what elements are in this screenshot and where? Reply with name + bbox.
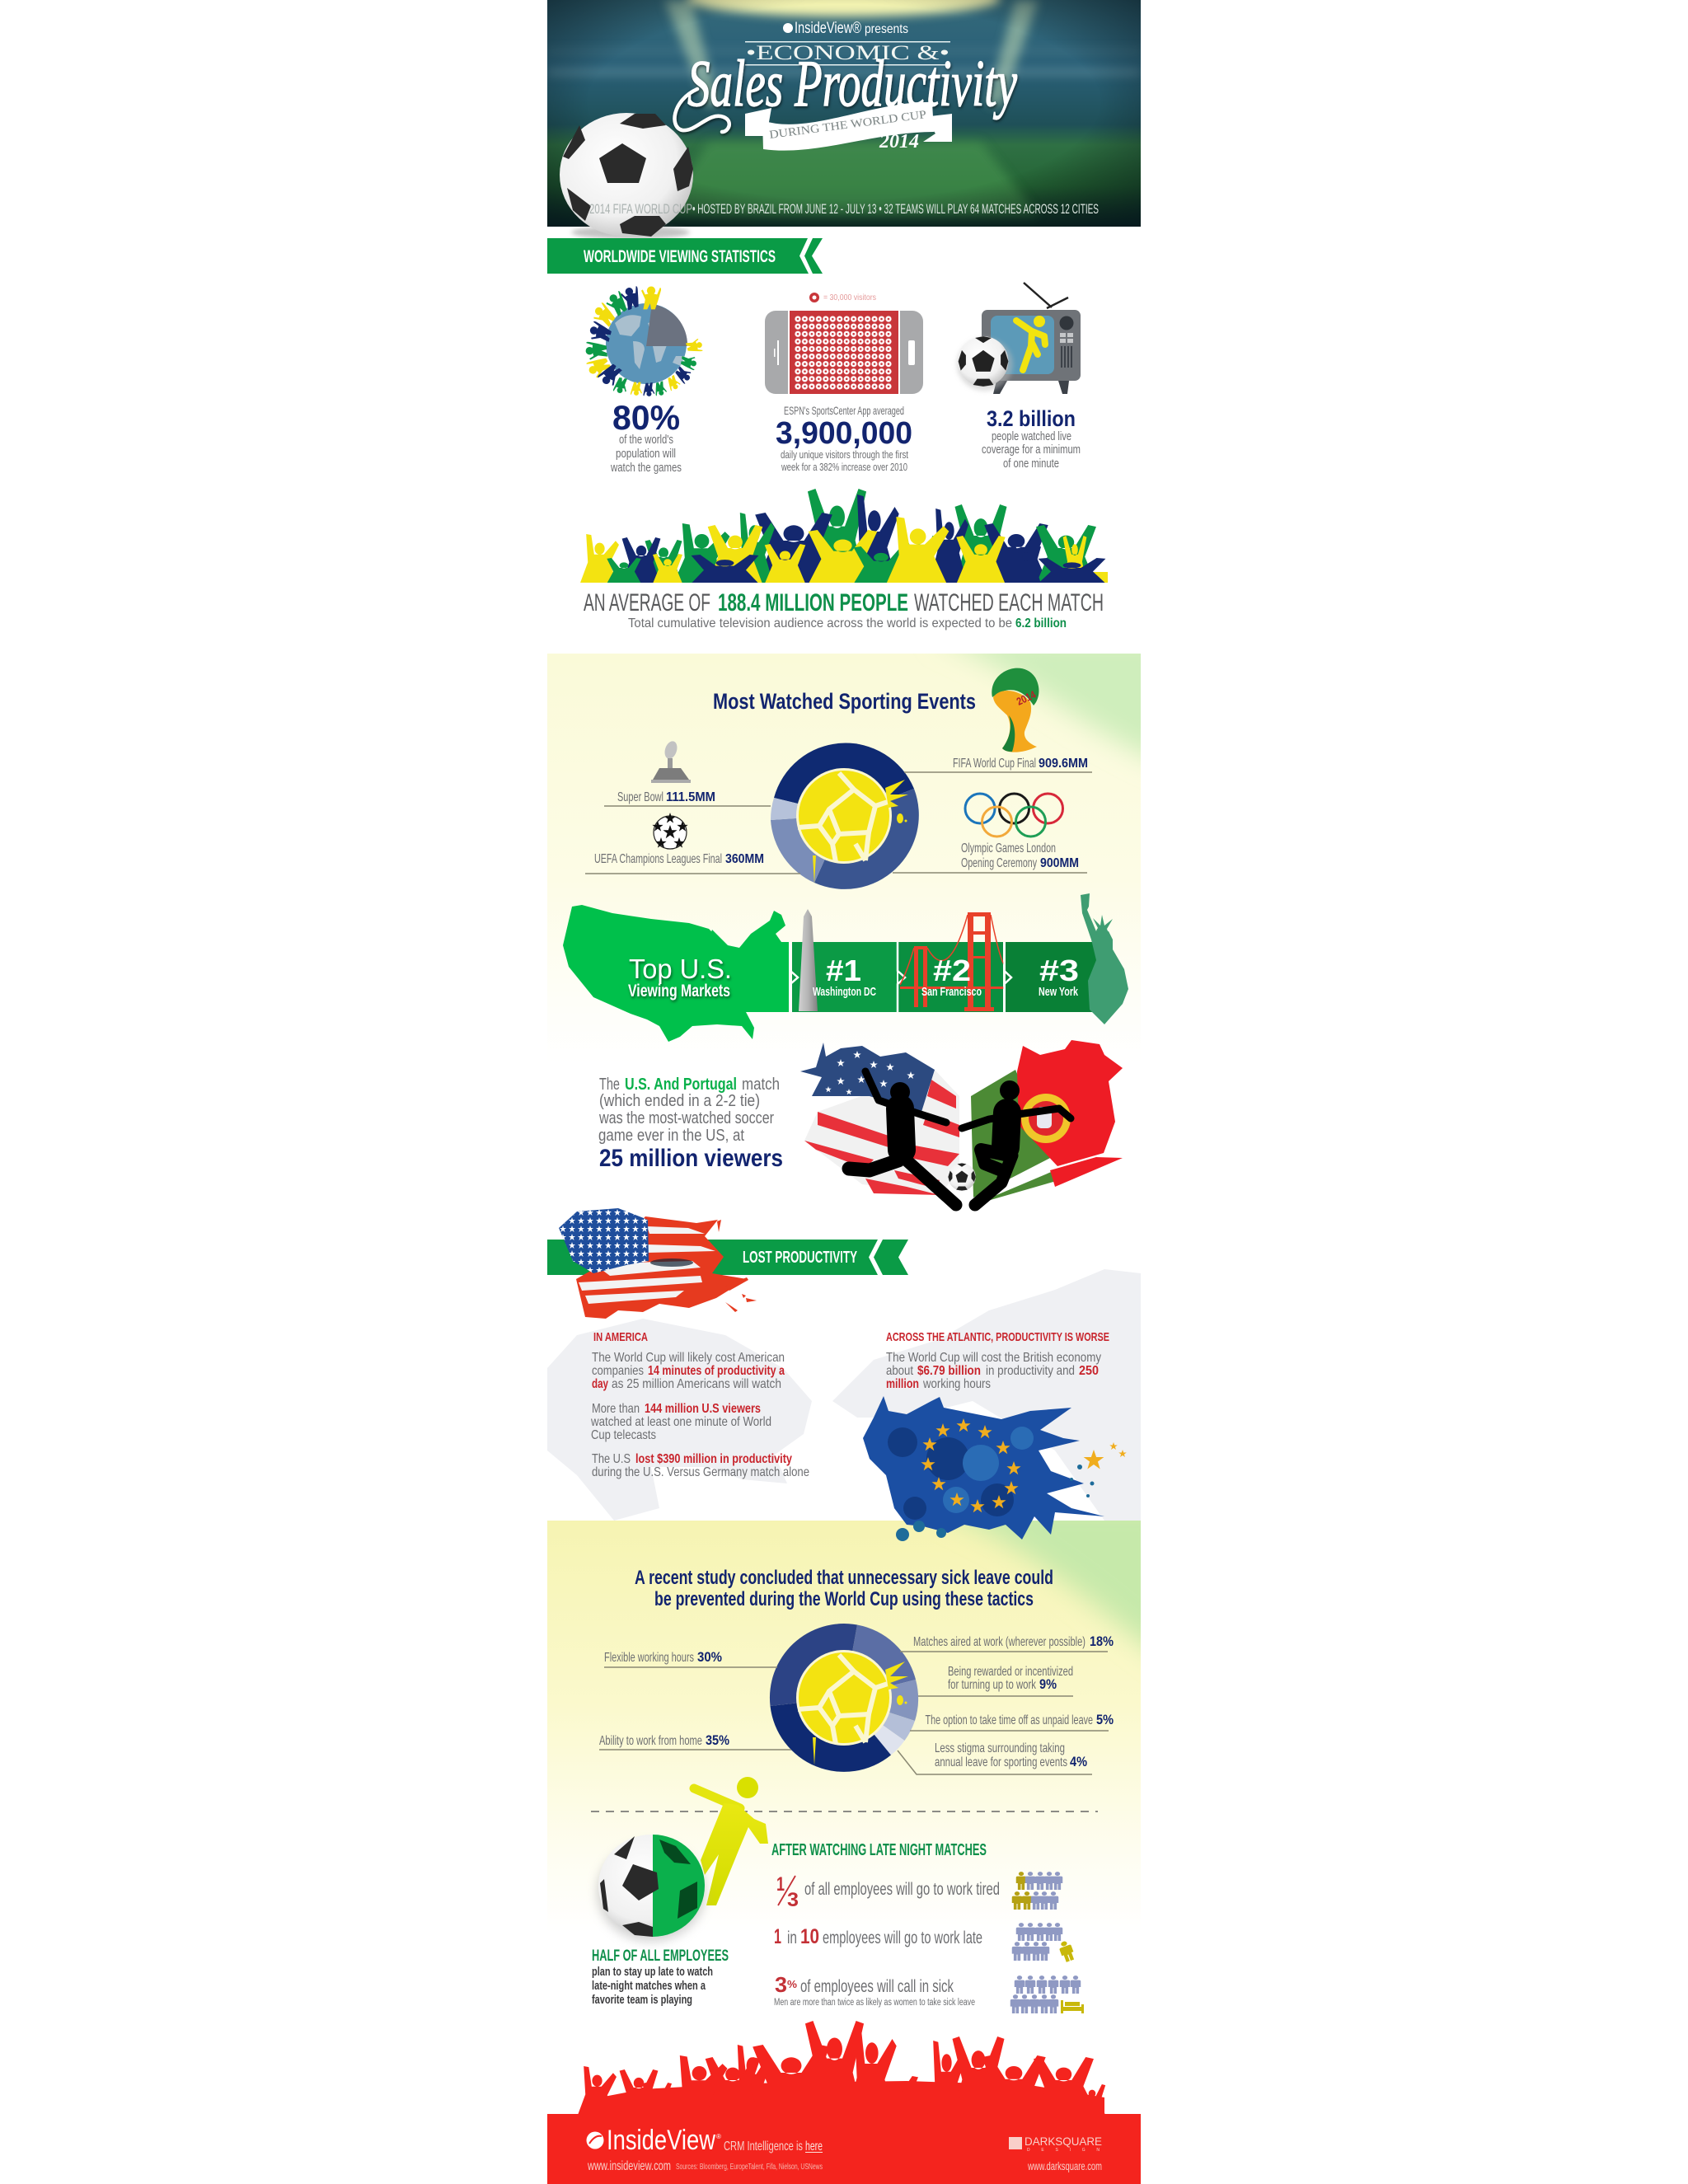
label: flexible working hours: [604, 1649, 777, 1667]
footer logo: InsideView: here: [805, 2139, 823, 2154]
label: uefa champions league: UEFA Champions Leagues Final: [594, 852, 722, 866]
chart: tactics donut: [770, 1624, 918, 1772]
label: work from home: [599, 1732, 791, 1750]
market 2: san francisco: [898, 912, 1004, 1012]
illustration: red crowd: [578, 2021, 1105, 2115]
title: sales productivity script: [674, 48, 1017, 132]
ribbon: [745, 102, 952, 152]
label: unpaid leave: [910, 1712, 1114, 1731]
text: US and Portugal match: game ever in the US, at: [598, 1127, 744, 1145]
icon: world cup 2014 logo: [992, 668, 1039, 752]
ribbon: 2014: [879, 131, 919, 152]
footer sources: [587, 2159, 823, 2173]
market 2: san francisco: #2: [933, 954, 971, 987]
header fact line: • HOSTED BY BRAZIL FROM JUNE 12 - JULY 13 • 32 TEAMS WILL PLAY 64 MATCHES ACROSS 12 CITIES: [692, 202, 1099, 217]
icon: world cup 2014 logo: 2014: [1015, 688, 1039, 708]
label: olympic games: [893, 794, 1087, 873]
stat: one third tired: of all employees will go to work tired: [804, 1880, 1000, 1899]
header logo line: [783, 20, 908, 37]
heading: sick leave study: A recent study concluded that unnecessary sick leave could: [635, 1567, 1053, 1589]
legend: 30,000 visitors: [809, 293, 876, 302]
stat: 3.2 billion TV: coverage for a minimum: [982, 443, 1081, 457]
text: half of all employees: late-night matches when a: [592, 1979, 706, 1993]
label: flexible working hours: Flexible working hours: [604, 1651, 694, 1665]
text: in america: during the U.S. Versus Germany match alone: [592, 1465, 809, 1479]
heading: average viewers per match: WATCHED EACH MATCH: [914, 589, 1104, 616]
text: in america: lost $390 million in productivity: [635, 1452, 792, 1466]
text: across the atlantic: [886, 1330, 1109, 1391]
label: less stigma: 4%: [1070, 1754, 1087, 1769]
pictogram: three percent of employees: [1010, 1975, 1084, 2013]
footer logo: InsideView: ®: [716, 2133, 721, 2140]
footer logo: InsideView: InsideView: [607, 2125, 715, 2156]
text: across the atlantic: about: [886, 1364, 913, 1378]
banner: lost productivity: LOST PRODUCTIVITY: [743, 1249, 857, 1267]
stat: 3,900,000 phone: ESPN's SportsCenter App averaged: [784, 404, 904, 417]
label: rewarded or incentivized: 9%: [1039, 1676, 1057, 1692]
stat: 80 percent globe: watch the games: [610, 461, 682, 475]
footer sources: Sources: Bloomberg, EuropeTalent, Fifa, Nielson, USNews: [676, 2162, 823, 2172]
label: work from home: Ability to work from home: [599, 1734, 702, 1748]
stat: 80 percent globe: [584, 284, 704, 475]
text: in america: Cup telecasts: [591, 1428, 656, 1442]
stat: three percent sick: [774, 1972, 1084, 2013]
icon: globe with people: [584, 284, 704, 397]
label: fifa world cup final: [904, 757, 1092, 772]
figure: left player: [849, 1071, 956, 1205]
footer logo: Darksquare: DARKSQUARE: [1025, 2135, 1102, 2148]
icon: olympic rings: [965, 794, 1063, 837]
text: across the atlantic: The World Cup will cost the British economy: [886, 1351, 1101, 1365]
text: top US: [628, 954, 732, 1001]
text: US and Portugal match: (which ended in a 2-2 tie): [599, 1092, 760, 1110]
label: super bowl: Super Bowl: [617, 790, 663, 804]
chart: most watched events donut: [771, 743, 919, 889]
panel: top US viewing markets: [563, 893, 1128, 1042]
market 2: san francisco: San Francisco: [921, 985, 982, 999]
legend: 30,000 visitors: = 30,000 visitors: [823, 293, 876, 302]
text: US and Portugal match: match: [742, 1076, 780, 1094]
label: fifa world cup final: FIFA World Cup Final: [953, 757, 1036, 771]
text: US and Portugal match: The: [599, 1076, 620, 1094]
stat: 3.2 billion TV: [957, 283, 1081, 471]
label: work from home: 35%: [706, 1732, 729, 1748]
text: in america: 144 million U.S viewers: [645, 1402, 761, 1416]
stat: 3.2 billion TV: of one minute: [1003, 457, 1059, 471]
map: united states: [563, 905, 789, 1042]
banner: worldwide viewing statistics: [547, 238, 823, 274]
title: economic: •ECONOMIC &•: [746, 42, 950, 64]
text: across the atlantic: in productivity and: [986, 1364, 1075, 1378]
label: rewarded or incentivized: [918, 1665, 1073, 1696]
stat: 80 percent globe: of the world's: [619, 433, 673, 447]
market 1: washington dc: Washington DC: [813, 985, 876, 999]
label: olympic games: Olympic Games London: [961, 841, 1056, 855]
label: uefa champions league: 360MM: [725, 852, 764, 866]
heading: average viewers per match: AN AVERAGE OF: [584, 589, 710, 616]
icon: soccer ball in header: 2014 FIFA WORLD CUP: [589, 202, 692, 217]
text: half of all employees: favorite team is playing: [592, 1993, 692, 2007]
text: half of all employees: plan to stay up late to watch: [592, 1965, 713, 1979]
label: unpaid leave: 5%: [1096, 1712, 1114, 1727]
panel: sick leave tactics background: [547, 1521, 1141, 1887]
label: uefa champions league: [585, 813, 800, 874]
icon: super bowl trophy: [651, 739, 691, 783]
icon: yellow kicking player: [694, 1777, 768, 1905]
text: top US: Viewing Markets: [628, 982, 730, 1001]
footer logo: InsideView: CRM Intelligence is: [724, 2139, 803, 2154]
label: super bowl: [604, 739, 771, 806]
label: matches aired at work: [900, 1633, 1114, 1652]
header: stadium hero: [547, 0, 1141, 227]
icon: half green soccer ball: [597, 1835, 706, 1942]
text: in america: More than: [592, 1402, 640, 1416]
stat: 80 percent globe: population will: [616, 447, 676, 461]
stat: 3,900,000 phone: 3,900,000: [776, 416, 912, 451]
pictogram: one in ten employees: [1012, 1923, 1076, 1963]
text: in america: The U.S: [592, 1452, 631, 1466]
label: less stigma: annual leave for sporting events: [935, 1755, 1067, 1769]
header logo line: presents: [865, 22, 908, 36]
stat: one third tired: [776, 1872, 1062, 1911]
heading: sick leave study: be prevented during the World Cup using these tactics: [654, 1588, 1034, 1610]
text: across the atlantic: working hours: [922, 1377, 991, 1391]
header logo line: InsideView®: [795, 20, 861, 37]
market 3: new york: #3: [1039, 954, 1079, 987]
illustration: EU flag paint splash: [863, 1396, 1127, 1541]
text: in america: IN AMERICA: [593, 1330, 648, 1344]
illustration: coloured crowd: [580, 489, 1108, 583]
footer logo: InsideView: [587, 2125, 823, 2156]
footer logo: Darksquare: [1009, 2135, 1102, 2172]
heading: average viewers per match: [584, 589, 1104, 630]
icon: match ball: [948, 1163, 976, 1191]
text: US and Portugal match: U.S. And Portugal: [625, 1076, 737, 1094]
footer sources: www.insideview.com: [587, 2159, 671, 2173]
stat: three percent sick: 3: [775, 1972, 787, 1997]
label: matches aired at work: 18%: [1090, 1633, 1114, 1649]
text: across the atlantic: $6.79 billion: [917, 1364, 981, 1378]
heading: average viewers per match: 6.2 billion: [1015, 616, 1067, 630]
heading: average viewers per match: 188.4 MILLION PEOPLE: [718, 589, 908, 616]
market 3: new york: [1004, 942, 1104, 1012]
text: in america: 14 minutes of productivity a: [648, 1364, 785, 1378]
stat: one in ten late: [774, 1923, 1076, 1963]
label: unpaid leave: The option to take time off as unpaid leave: [925, 1713, 1093, 1727]
text: in america: day: [592, 1377, 608, 1391]
title: sales productivity script: Sales Productivity: [687, 48, 1017, 120]
heading: sick leave study: [635, 1567, 1053, 1610]
stat: one in ten late: 10: [800, 1925, 819, 1948]
stat: one in ten late: 1: [774, 1925, 781, 1948]
label: olympic games: Opening Ceremony: [961, 856, 1037, 870]
stat: 3.2 billion TV: people watched live: [992, 429, 1071, 443]
text: top US: Top U.S.: [629, 954, 732, 984]
label: flexible working hours: 30%: [697, 1649, 722, 1665]
label: olympic games: 900MM: [1040, 856, 1079, 870]
text: half of all employees: [592, 1947, 729, 2007]
market 1: washington dc: [790, 909, 897, 1012]
heading: after watching late night matches: AFTER WATCHING LATE NIGHT MATCHES: [771, 1841, 987, 1859]
stat: one third tired: 1: [776, 1873, 785, 1896]
label: super bowl: 111.5MM: [666, 790, 715, 804]
footer: [547, 2114, 1141, 2184]
text: in america: companies: [592, 1364, 644, 1378]
market 3: new york: New York: [1039, 985, 1078, 999]
text: US and Portugal match: was the most-watched soccer: [598, 1109, 774, 1127]
label: less stigma: [898, 1741, 1092, 1774]
stat: 3,900,000 phone: week for a 382% increase over 2010: [781, 461, 907, 473]
illustration: grunge American flag: [559, 1208, 757, 1319]
stat: one in ten late: in: [787, 1929, 797, 1947]
map: grey world map backdrop: [547, 1269, 1141, 1521]
banner: worldwide viewing statistics: WORLDWIDE VIEWING STATISTICS: [584, 247, 776, 266]
text: across the atlantic: million: [886, 1377, 919, 1391]
heading: most watched sporting events: Most Watched Sporting Events: [713, 689, 976, 714]
stat: 3,900,000 phone: daily unique visitors through the first: [781, 448, 908, 461]
icon: phone with grid: [765, 311, 923, 394]
icon: television with ball: [957, 283, 1081, 394]
label: rewarded or incentivized: for turning up to work: [948, 1678, 1037, 1692]
stat: three percent sick: Men are more than twice as likely as women to take sick leave: [774, 1998, 975, 2008]
heading: average viewers per match: Total cumulative television audience across the world is expected to be: [628, 616, 1012, 630]
label: fifa world cup final: 909.6MM: [1039, 757, 1088, 771]
text: US and Portugal match: [598, 1076, 783, 1172]
stat: 3.2 billion TV: 3.2 billion: [987, 406, 1076, 431]
pictogram: one third of employees: [1012, 1872, 1062, 1910]
label: less stigma: Less stigma surrounding taking: [935, 1741, 1065, 1755]
label: matches aired at work: Matches aired at work (wherever possible): [913, 1635, 1085, 1649]
text: across the atlantic: ACROSS THE ATLANTIC, PRODUCTIVITY IS WORSE: [886, 1330, 1109, 1344]
banner: lost productivity: [547, 1240, 908, 1275]
stat: 80 percent globe: 80%: [612, 398, 680, 437]
text: in america: [590, 1330, 809, 1479]
stat: 3,900,000 phone: [765, 293, 923, 473]
panel: most watched sporting events background: [547, 654, 1141, 994]
figure: right player: [962, 1108, 1071, 1205]
label: rewarded or incentivized: Being rewarded or incentivized: [948, 1665, 1073, 1679]
icon: statue of liberty: [1081, 893, 1128, 1024]
illustration: US and Portugal players: [800, 1040, 1123, 1205]
ribbon: DURING THE WORLD CUP: [769, 109, 927, 142]
stat: three percent sick: %: [787, 1978, 797, 1990]
text: half of all employees: HALF OF ALL EMPLOYEES: [592, 1947, 729, 1965]
footer logo: Darksquare: DESIGN: [1027, 2148, 1100, 2153]
stat: one third tired: 3: [787, 1889, 799, 1911]
market 1: washington dc: #1: [826, 954, 861, 987]
icon: soccer ball in header: [560, 113, 693, 239]
text: in america: The World Cup will likely cost American: [592, 1351, 785, 1365]
text: in america: as 25 million Americans will watch: [612, 1377, 781, 1391]
text: across the atlantic: 250: [1079, 1364, 1099, 1378]
icon: champions league star ball: [652, 813, 688, 849]
text: in america: watched at least one minute of World: [590, 1415, 771, 1429]
footer logo: Darksquare: www.darksquare.com: [1027, 2159, 1102, 2172]
stat: three percent sick: of employees will call in sick: [800, 1977, 954, 1996]
stat: one in ten late: employees will go to work late: [823, 1929, 982, 1947]
text: US and Portugal match: 25 million viewers: [599, 1145, 783, 1172]
